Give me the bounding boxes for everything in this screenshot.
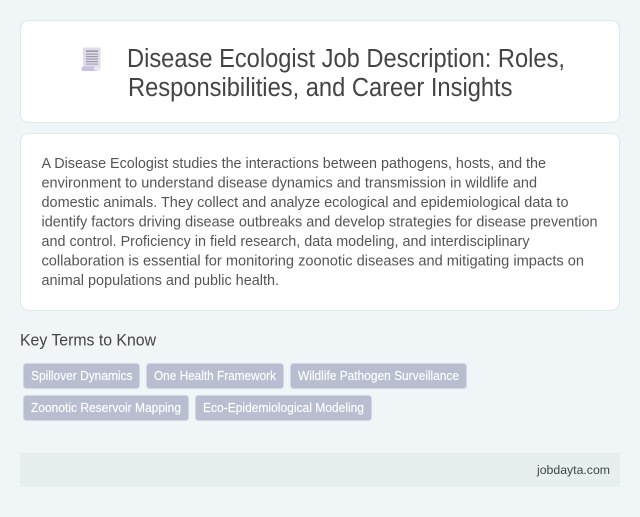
tag: One Health Framework: One Health Framework [154,369,277,383]
tag: One Health Framework [146,364,284,388]
tag: Eco-Epidemiological Modeling: Eco-Epidemiological Modeling [203,401,364,415]
tag: Wildlife Pathogen Surveillance [290,364,466,388]
description text: A Disease Ecologist studies the interactions between pathogens, hosts, and the [42,156,546,172]
description text: environment to understand disease dynamics and transmission in wildlife and [42,176,537,192]
tag: Zoonotic Reservoir Mapping: Zoonotic Reservoir Mapping [31,401,181,415]
title: Responsibilities, and Career Insights [128,74,512,102]
description text: identify factors driving disease outbreaks and develop strategies for disease prevention [42,214,598,230]
description text: domestic animals. They collect and analyze ecological and epidemiological data to [42,195,568,211]
description text: collaboration is essential for monitoring zoonotic diseases and mitigating impacts on [42,254,584,270]
title: Disease Ecologist Job Description: Roles, [127,45,565,73]
tag: Spillover Dynamics [24,364,140,388]
tag: Spillover Dynamics: Spillover Dynamics [31,369,132,383]
tag: Wildlife Pathogen Surveillance: Wildlife Pathogen Surveillance [298,369,459,383]
description text: animal populations and public health. [42,273,279,289]
icon: document scroll [82,48,100,71]
footer bar [20,453,620,487]
title [127,45,565,102]
description text [42,156,598,289]
description text: and control. Proficiency in field research, data modeling, and interdisciplinary [42,234,530,250]
tag: Zoonotic Reservoir Mapping [24,396,188,420]
key terms tags [24,364,466,420]
panel: description [20,134,620,310]
heading: key terms: Key Terms to Know [20,332,156,350]
footer source: jobdayta.com [536,463,610,477]
panel: title card [20,20,620,122]
tag: Eco-Epidemiological Modeling [196,396,372,420]
